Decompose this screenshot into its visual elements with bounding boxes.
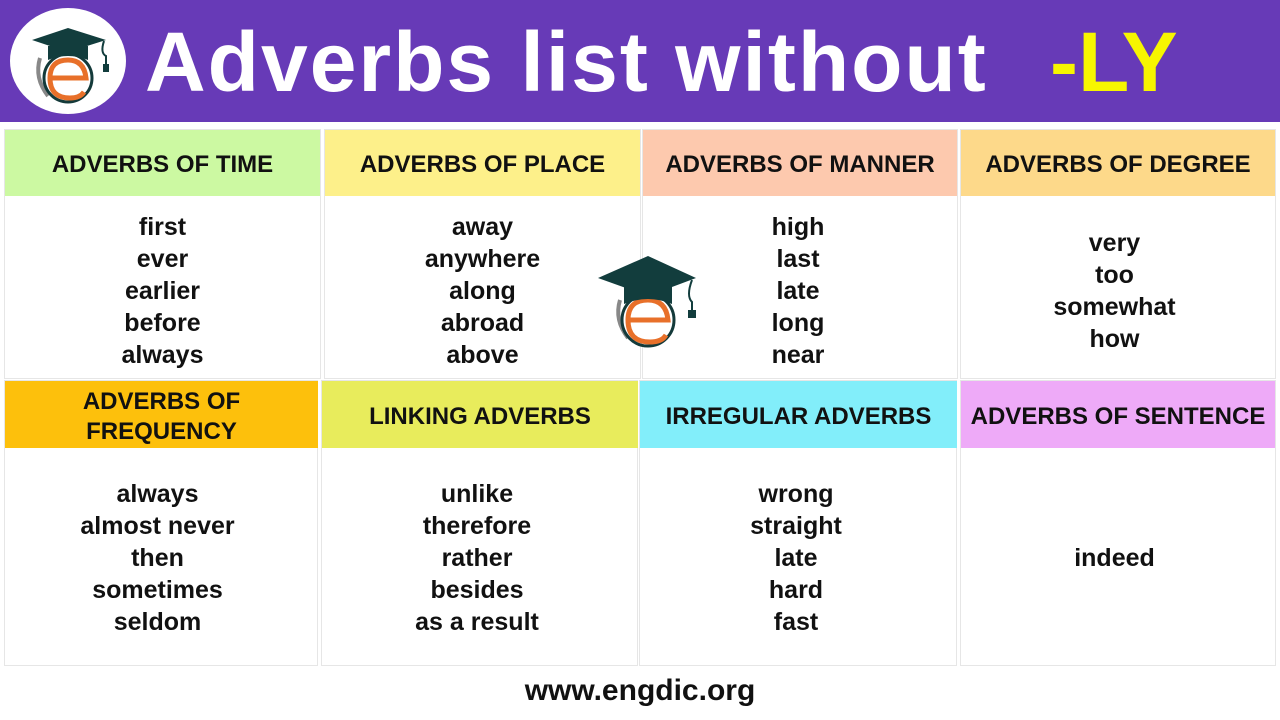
text: very xyxy=(1089,229,1140,257)
panel: irregular xyxy=(639,380,957,666)
title: Adverbs list without xyxy=(145,15,988,109)
text: ADVERBS OF TIME xyxy=(52,151,273,178)
footer url: www.engdic.org xyxy=(525,674,755,707)
text: above xyxy=(446,341,519,369)
text: before xyxy=(124,309,201,337)
text: too xyxy=(1095,261,1134,289)
text: somewhat xyxy=(1053,293,1176,321)
text: how xyxy=(1090,325,1140,353)
text: ADVERBS OF xyxy=(83,388,240,414)
text: ADVERBS OF DEGREE xyxy=(985,151,1251,178)
text: late xyxy=(774,544,818,572)
text: ADVERBS OF SENTENCE xyxy=(971,402,1265,430)
text: IRREGULAR ADVERBS xyxy=(666,402,931,430)
text: along xyxy=(449,277,516,305)
text: as a result xyxy=(415,608,539,636)
text: earlier xyxy=(125,277,200,305)
panel: frequency xyxy=(4,380,318,666)
text: anywhere xyxy=(425,245,540,273)
text: near xyxy=(772,341,824,369)
panel: manner xyxy=(642,129,958,379)
logo xyxy=(10,8,126,114)
text: hard xyxy=(769,576,823,604)
header banner xyxy=(0,0,1280,122)
header banner: -LY xyxy=(1050,15,1178,109)
text: ADVERBS OF PLACE xyxy=(360,151,605,178)
text: unlike xyxy=(441,480,513,508)
text: seldom xyxy=(114,608,201,636)
text: high xyxy=(772,213,824,241)
text: therefore xyxy=(423,512,531,540)
text: long xyxy=(772,309,824,337)
text: ever xyxy=(137,245,188,273)
text: abroad xyxy=(441,309,524,337)
text: rather xyxy=(442,544,512,572)
center logo xyxy=(598,256,696,348)
text: sometimes xyxy=(92,576,223,604)
text: always xyxy=(116,480,198,508)
panel: time xyxy=(4,129,321,379)
panel: sentence xyxy=(960,380,1276,666)
text: besides xyxy=(430,576,524,604)
text: first xyxy=(139,213,186,241)
text: almost never xyxy=(80,512,235,540)
text: late xyxy=(776,277,820,305)
text: last xyxy=(776,245,820,273)
text: FREQUENCY xyxy=(86,418,237,444)
panel: place xyxy=(324,129,641,379)
text: always xyxy=(121,341,204,369)
text: wrong xyxy=(758,480,834,508)
panel: linking xyxy=(321,380,638,666)
text: fast xyxy=(774,608,818,636)
text: ADVERBS OF MANNER xyxy=(665,151,935,178)
text: LINKING ADVERBS xyxy=(369,402,591,430)
panel: degree xyxy=(960,129,1276,379)
text: then xyxy=(131,544,184,572)
text: away xyxy=(452,213,513,241)
text: straight xyxy=(750,512,842,540)
text: indeed xyxy=(1074,544,1155,572)
